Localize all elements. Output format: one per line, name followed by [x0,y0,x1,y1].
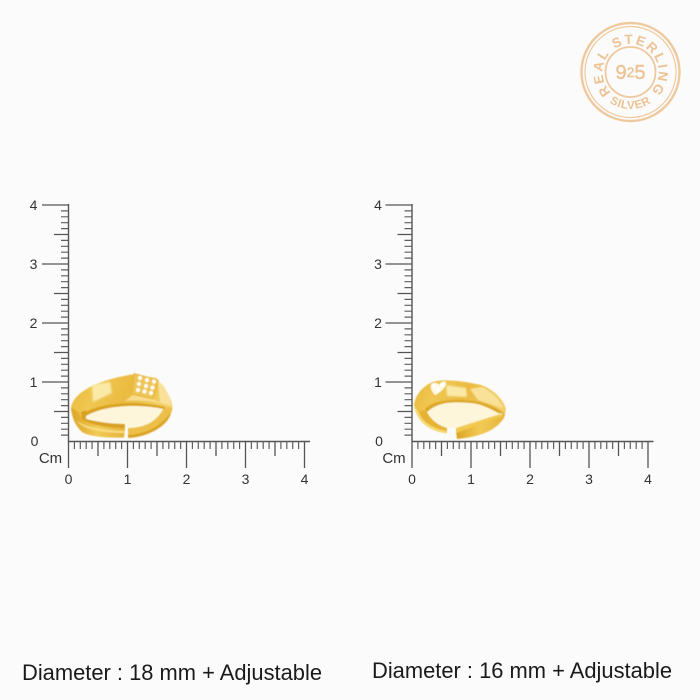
left ruler axis labels: 3 [30,256,38,272]
right ruler axis labels: 3 [585,471,593,487]
left ruler axis labels: 2 [30,315,38,331]
badge: real sterling silver 925: 5 [634,62,646,84]
right ruler axis labels [374,197,652,487]
right ruler axis labels: 1 [374,374,382,390]
left ring [71,374,172,438]
right ruler axis labels: 0 [375,433,383,449]
badge: real sterling silver 925: SILVER [610,96,651,109]
left ruler axis labels: 4 [301,471,309,487]
left ruler axis labels: 0 [65,471,73,487]
right ruler axis labels: 4 [644,471,652,487]
badge: real sterling silver 925: 9 [615,62,627,84]
left ruler axis labels: 1 [30,374,38,390]
right ruler axis labels: 2 [526,471,534,487]
left ruler axis labels [30,197,309,487]
right ruler axis labels: Cm [382,450,406,467]
left ruler [30,197,310,487]
caption: right ring diameter: Diameter : 16 mm + Adjustable [372,658,672,683]
left ruler axis labels: 2 [183,471,191,487]
badge: real sterling silver 925: REAL STERLING [594,34,668,98]
caption: left ring diameter: Diameter : 18 mm + Adjustable [22,660,322,685]
left ruler axis labels: 3 [242,471,250,487]
heart stone setting [430,381,447,396]
right ruler axis labels: 3 [374,256,382,272]
right ruler axis labels: 4 [374,197,382,213]
badge: real sterling silver 925 [580,22,681,122]
right ruler [374,197,654,487]
badge: real sterling silver 925: 2 [627,64,635,80]
left ruler axis labels: 1 [124,471,132,487]
right ruler axis labels: 1 [467,471,475,487]
right ruler axis labels: 2 [374,315,382,331]
left ruler axis labels: 4 [30,197,38,213]
left ruler axis labels: 0 [31,433,39,449]
right ring [414,380,506,439]
left ruler axis labels: Cm [39,450,62,467]
right ruler axis labels: 0 [408,471,416,487]
pave diamond setting [132,374,158,399]
